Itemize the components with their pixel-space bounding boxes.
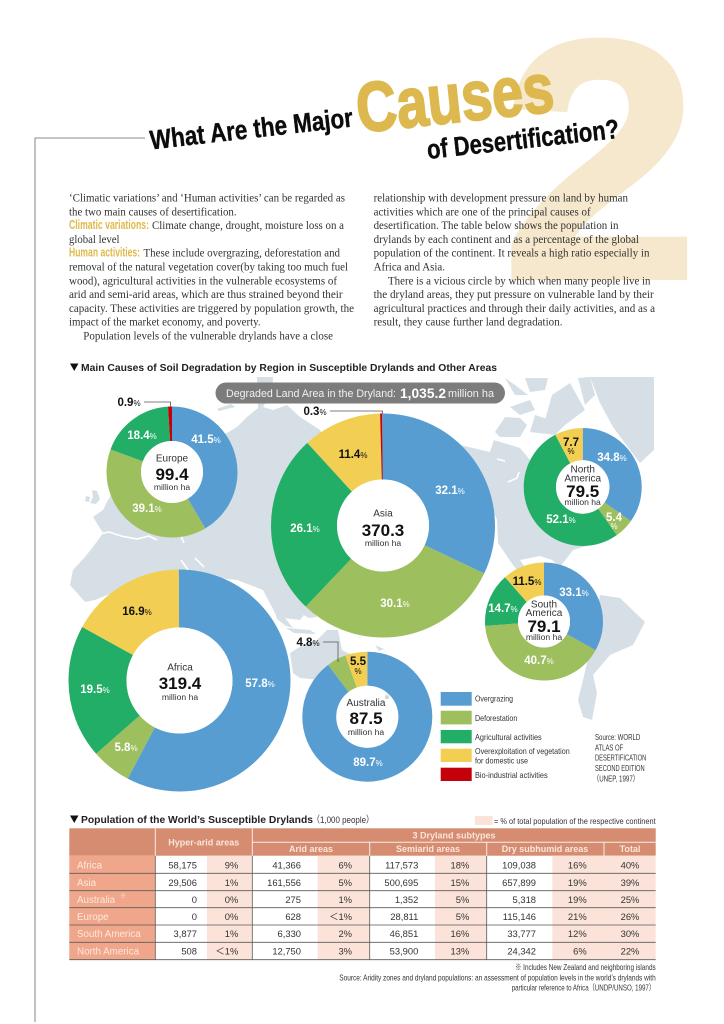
- population table: 41,366: [272, 860, 301, 870]
- source note: atlas: ATLAS OF: [595, 742, 623, 752]
- population table: 1%: [225, 928, 238, 939]
- population table: Semiarid areas: [396, 844, 460, 854]
- text block: right column: There is a vicious circle by which when many people live in: [388, 273, 651, 287]
- population table: ※: [120, 893, 126, 900]
- population table: 21%: [568, 911, 587, 922]
- population table: 24,342: [507, 946, 536, 956]
- population table: 29,506: [168, 877, 197, 888]
- heading: population table: Population of the World’s Susceptible Drylands: [81, 814, 313, 826]
- population table: 53,900: [390, 946, 418, 956]
- title: What Are the Major: [148, 103, 355, 155]
- text block: left column: Population levels of the vulnerable drylands have a close: [83, 328, 333, 342]
- population table: 109,038: [502, 860, 536, 870]
- donut chart: South America: 79.1: [527, 617, 561, 636]
- population table: 28,811: [390, 911, 418, 922]
- population table: 275: [285, 894, 301, 905]
- population table: 3,877: [174, 928, 197, 939]
- donut chart: North America: 5.4: [606, 512, 623, 524]
- population table: 117,573: [385, 860, 418, 870]
- donut chart: Europe: Europe: [156, 454, 189, 464]
- text block: left column: Climatic variations:: [69, 218, 149, 232]
- donut chart: Australia: 87.5: [349, 709, 383, 728]
- donut chart: Europe: 39.1%: [132, 503, 162, 515]
- population table: 657,899: [502, 877, 536, 888]
- population table: 6%: [573, 946, 587, 956]
- population table: Australia: [77, 895, 116, 906]
- donut chart: Africa: 57.8%: [245, 678, 275, 690]
- population table: 30%: [621, 928, 639, 939]
- population table: 22%: [621, 946, 639, 956]
- population table: Hyper-arid areas: [168, 838, 239, 848]
- source note: atlas: DESERTIFICATION: [595, 753, 646, 763]
- donut chart: Europe: 18.4%: [127, 430, 157, 442]
- source note: atlas: Source: WORLD: [595, 732, 640, 742]
- population table: 161,556: [267, 877, 301, 888]
- population table: 16%: [568, 860, 587, 870]
- donut chart: Africa: million ha: [162, 692, 198, 702]
- donut chart: South America: 11.5%: [513, 576, 541, 588]
- title: Causes: [352, 48, 557, 147]
- text block: left column: impact of the market economy, and poverty.: [69, 315, 261, 329]
- donut chart: Asia: 30.1%: [380, 598, 410, 610]
- population table: 5,318: [513, 894, 536, 905]
- donut chart: South America: [488, 576, 589, 667]
- population table: 13%: [451, 946, 469, 956]
- donut chart: Africa: 19.5%: [80, 684, 110, 696]
- population table: 1%: [338, 894, 352, 905]
- text block: right column: [374, 190, 656, 329]
- text block: left column: wood), agricultural activities in the vulnerable ecosystems of: [69, 273, 337, 287]
- legend: Overgrazing: [475, 694, 513, 704]
- donut chart: Europe: 41.5%: [191, 434, 221, 446]
- donut chart: South America: 14.7%: [488, 603, 518, 615]
- text block: right column: Africa and Asia.: [374, 260, 445, 274]
- text block: right column: result, they cause further land degradation.: [374, 315, 563, 329]
- footnotes: particular reference to Africa（UNDP/UNSO, 1997）: [512, 983, 655, 993]
- population table: Dry subhumid areas: [502, 844, 588, 854]
- population table: 5%: [456, 911, 469, 922]
- population table: 1%: [225, 877, 238, 888]
- donut chart: North America: 52.1%: [546, 514, 576, 526]
- footnotes: ※ Includes New Zealand and neighboring islands: [515, 962, 656, 972]
- population table: 16%: [451, 928, 469, 939]
- population table: Asia: [77, 878, 97, 889]
- population table: 19%: [568, 877, 587, 888]
- population table: 6%: [338, 860, 352, 870]
- donut chart: Europe: million ha: [154, 482, 190, 492]
- donut chart: North America: North: [570, 464, 595, 476]
- donut chart: Africa: 319.4: [159, 674, 202, 693]
- title: of Desertification?: [425, 114, 620, 165]
- population table: [69, 828, 656, 960]
- world map background: [70, 377, 654, 720]
- population table: 25%: [621, 894, 639, 905]
- donut chart: South America: South: [531, 600, 557, 610]
- population table: 33,777: [507, 928, 536, 939]
- population table: 6,330: [278, 928, 301, 939]
- legend: Overexploitation of vegetation: [475, 746, 570, 756]
- donut chart: Australia: ※: [384, 694, 390, 701]
- population table: 5%: [338, 877, 352, 888]
- population table: 40%: [621, 860, 639, 870]
- text block: right column: drylands by each continent and as a percentage of the global: [374, 232, 640, 246]
- donut chart: Australia: 4.8%: [296, 637, 320, 649]
- legend: Bio-industrial activities: [475, 770, 548, 780]
- population table: 12%: [568, 928, 587, 939]
- text block: right column: population of the continent. It reveals a high ratio especially in: [374, 246, 650, 260]
- text block: left column: Climate change, drought, moisture loss on a: [152, 218, 345, 232]
- population table: Arid areas: [289, 844, 333, 854]
- donut chart: Australia: million ha: [348, 727, 384, 737]
- donut chart: South America: 33.1%: [559, 587, 589, 599]
- frame line: [35, 138, 145, 1022]
- population table: 3 Dryland subtypes: [412, 830, 496, 840]
- map inland water details: [95, 439, 519, 580]
- donut chart: North America: America: [564, 474, 601, 484]
- donut chart: Asia: 32.1%: [435, 485, 465, 497]
- donut chart: North America: 7.7: [563, 437, 579, 449]
- heading: population table: （1,000 people）: [312, 814, 374, 826]
- source note: atlas: SECOND EDITION: [595, 763, 645, 773]
- text block: left column: the two main causes of desertification.: [69, 204, 237, 218]
- text block: left column: These include overgrazing, deforestation and: [144, 246, 340, 260]
- population table: South America: [77, 929, 141, 940]
- legend: for domestic use: [475, 756, 528, 766]
- donut chart: Africa: 5.8%: [114, 742, 138, 754]
- population table: 1,352: [395, 894, 418, 905]
- donut chart: Africa: 16.9%: [122, 606, 152, 618]
- population table: 3%: [338, 946, 352, 956]
- text block: left column: [69, 190, 354, 342]
- table key: = % of total population of the respective continent: [494, 816, 656, 826]
- donut chart: Asia: 370.3: [362, 521, 404, 540]
- population table: 0%: [225, 894, 238, 905]
- donut chart: Australia: 5.5: [350, 656, 367, 668]
- donut chart: North America: [540, 437, 627, 531]
- population table: Europe: [77, 912, 109, 923]
- donut chart: Europe: 99.4: [155, 465, 189, 484]
- donut chart: North America: million ha: [565, 497, 601, 507]
- text block: left column: arid and semi-arid areas, which are thus strained beyond their: [69, 287, 343, 301]
- population table: 15%: [451, 877, 469, 888]
- population table: North America: [77, 946, 140, 958]
- text block: left column: capacity. These activities are triggered by population growth, the: [69, 301, 354, 315]
- title: [148, 48, 620, 165]
- donut chart: South America: 40.7%: [524, 655, 554, 667]
- text block: left column: removal of the natural vegetation cover(by taking too much fuel: [69, 260, 349, 274]
- donut chart: North America: 34.8%: [597, 452, 627, 464]
- population table: 18%: [451, 860, 469, 870]
- population table: ＜1%: [329, 911, 352, 922]
- text block: left column: ‘Climatic variations’ and ‘Human activities’ can be regarded as: [69, 190, 345, 204]
- population table: Total: [620, 844, 640, 854]
- donut chart: Asia: Asia: [373, 508, 393, 520]
- donut chart: Asia: 26.1%: [290, 523, 320, 535]
- text block: right column: desertification. The table below shows the population in: [374, 218, 619, 232]
- donut chart: Asia: [290, 406, 465, 610]
- population table: 0: [192, 894, 197, 905]
- pill: degraded land total: million ha: [448, 388, 494, 400]
- text block: left column: Human activities:: [69, 246, 140, 260]
- source note: atlas: （UNEP, 1997）: [593, 774, 639, 784]
- donut chart: Asia: million ha: [365, 538, 401, 548]
- population table: 9%: [225, 860, 238, 870]
- donut chart: Asia: 0.3%: [303, 406, 327, 418]
- text block: right column: activities which are one of the principal causes of: [374, 204, 591, 218]
- population table: 5%: [456, 894, 469, 905]
- donut chart: Australia: Australia: [347, 698, 386, 709]
- donut chart: Australia: [296, 637, 415, 769]
- legend: Deforestation: [475, 713, 518, 723]
- population table: 39%: [621, 877, 639, 888]
- text block: left column: global level: [69, 232, 120, 246]
- donut chart: Europe: [117, 397, 221, 520]
- population table: 0: [192, 911, 197, 922]
- text block: right column: the dryland areas, they put pressure on vulnerable land by their: [374, 287, 654, 301]
- population table: 115,146: [503, 911, 536, 922]
- donut chart: Australia: 89.7%: [353, 757, 383, 769]
- pill: degraded land total: [216, 382, 505, 404]
- donut chart: North America: %: [610, 522, 618, 531]
- text block: right column: relationship with development pressure on land by human: [374, 190, 628, 204]
- legend: Agricultural activities: [475, 732, 542, 742]
- population table: 508: [181, 946, 197, 956]
- footnotes: [339, 962, 656, 993]
- population table: Africa: [77, 860, 103, 872]
- population table: ＜1%: [215, 946, 238, 956]
- population table: 628: [285, 911, 301, 922]
- donut chart: Africa: [80, 598, 275, 762]
- donut chart: Europe: 0.9%: [117, 397, 141, 409]
- donut chart: Australia: %: [354, 667, 362, 676]
- population table: 26%: [621, 911, 639, 922]
- donut chart: South America: America: [526, 608, 563, 619]
- population table: 0%: [225, 911, 238, 922]
- donut chart: South America: million ha: [526, 632, 562, 642]
- population table: 58,175: [168, 860, 197, 870]
- population table: 12,750: [272, 946, 301, 956]
- population table: 2%: [338, 928, 352, 939]
- donut chart: North America: 79.5: [566, 482, 599, 501]
- pill: degraded land total: Degraded Land Area in the Dryland:: [226, 388, 396, 400]
- population table: 500,695: [384, 877, 418, 888]
- donut chart: North America: %: [567, 447, 575, 456]
- population table: 19%: [568, 894, 587, 905]
- source note: atlas: [593, 732, 646, 784]
- legend: [441, 692, 570, 781]
- heading: soil degradation: Main Causes of Soil Degradation by Region in Susceptible Drylands and Other Areas: [81, 362, 497, 374]
- text block: right column: agricultural practices and through their daily activities, and as a: [374, 301, 656, 315]
- population table: 46,851: [390, 928, 418, 939]
- pill: degraded land total: 1,035.2: [400, 385, 446, 401]
- donut chart: Asia: 11.4%: [339, 449, 367, 461]
- donut chart: Africa: Africa: [167, 662, 193, 674]
